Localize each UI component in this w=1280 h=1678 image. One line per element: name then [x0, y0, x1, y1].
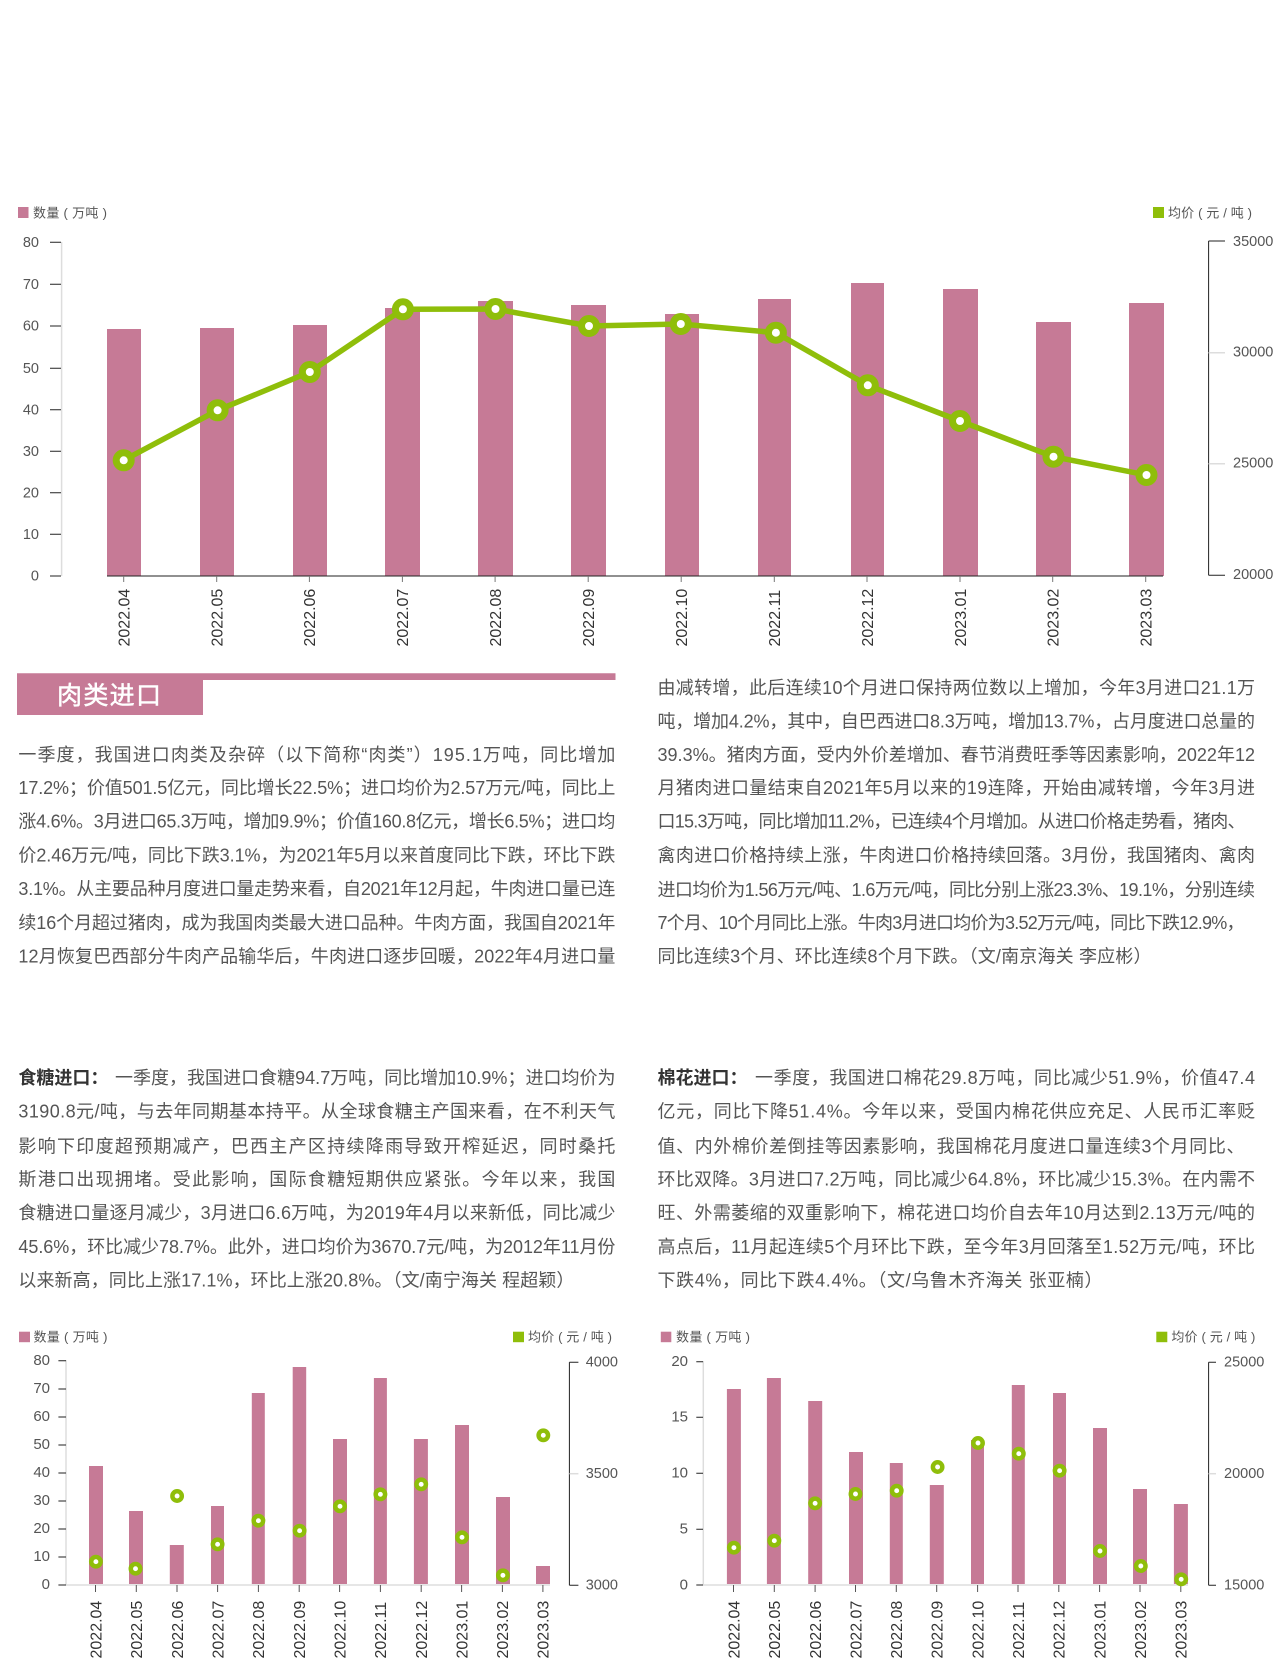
left axis: 0	[42, 1576, 50, 1593]
x axis labels: 2022.11	[767, 590, 784, 646]
x axis labels: 2023.03	[1174, 1601, 1191, 1658]
text block: meat imports right column: 7个月、10个月同比上涨。牛肉3月进口均价为3.52万元/吨，同比下跌12.9%，	[658, 913, 1244, 933]
x axis labels: 2022.05	[210, 589, 226, 646]
left axis: 50	[23, 361, 39, 377]
text block: meat imports left column: 价2.46万元/吨，同比下跌3.1%，为2021年5月以来首度同比下跌，环比下跌	[18, 846, 615, 866]
text block: cotton imports: 下跌4%，同比下跌4.4%。（文/乌鲁木齐海关 张亚楠）	[658, 1270, 1102, 1290]
text block: meat imports left column: 3.1%。从主要品种月度进口量走势来看，自2021年12月起，牛肉进口量已连	[18, 879, 615, 899]
text block: meat imports right column: 吨，增加4.2%，其中，自巴西进口8.3万吨，增加13.7%，占月度进口总量的	[658, 712, 1255, 732]
text block: meat imports left column: 续16个月超过猪肉，成为我国肉类最大进口品种。牛肉方面，我国自2021年	[18, 913, 615, 933]
text block: cotton imports: 一季度，我国进口棉花29.8万吨，同比减少51.9%，价值47.4	[755, 1068, 1255, 1088]
x axis with ticks	[703, 1585, 1188, 1592]
text block: meat imports left column	[18, 745, 615, 966]
right axis	[569, 1354, 618, 1594]
x axis labels	[88, 1601, 553, 1658]
price markers	[91, 1431, 548, 1580]
x axis labels: 2022.08	[488, 589, 505, 646]
left axis	[23, 235, 62, 585]
bars: quantity	[89, 1367, 550, 1584]
x axis labels: 2023.01	[953, 589, 970, 646]
heading: meat imports: 肉类进口	[57, 682, 161, 710]
left axis: 10	[33, 1548, 50, 1565]
text block: cotton imports: 值、内外棉价差倒挂等因素影响，我国棉花月度进口量连续3个月同比、	[658, 1136, 1244, 1156]
x axis labels: 2022.06	[808, 1601, 825, 1658]
text block: cotton imports: 旺、外需萎缩的双重影响下，棉花进口均价自去年10月达到2.13万元/吨的	[658, 1203, 1255, 1223]
heading: meat imports	[17, 673, 616, 715]
right axis: 25000	[1233, 456, 1273, 472]
text block: sugar imports	[18, 1067, 615, 1290]
x axis labels: 2023.02	[1133, 1601, 1150, 1658]
x axis labels	[726, 1601, 1191, 1658]
text block: cotton imports: 棉花进口：	[658, 1068, 748, 1088]
chart: sugar imports quantity and average price	[19, 1330, 618, 1658]
left axis: 30	[23, 444, 39, 460]
x axis labels: 2022.09	[930, 1601, 946, 1658]
text block: meat imports left column: 12月恢复巴西部分牛肉产品输华后，牛肉进口逐步回暖，2022年4月进口量	[18, 946, 615, 966]
x axis labels: 2022.04	[116, 589, 134, 646]
text block: meat imports right column: 口15.3万吨，同比增加11.2%，已连续4个月增加。从进口价格走势看，猪肉、	[658, 812, 1246, 832]
x axis labels: 2023.03	[1138, 589, 1156, 646]
text block: meat imports right column	[658, 678, 1255, 966]
x axis labels: 2022.07	[848, 1601, 865, 1658]
legend: quantity: 数量 ( 万吨 )	[33, 206, 107, 220]
x axis labels: 2022.08	[251, 1601, 268, 1658]
right axis	[1209, 234, 1273, 583]
bars: quantity	[727, 1378, 1188, 1584]
text block: sugar imports: 影响下印度超预期减产，巴西主产区持续降雨导致开榨延迟，同时桑托	[18, 1136, 615, 1156]
text block: sugar imports: 45.6%，环比减少78.7%。此外，进口均价为3670.7元/吨，为2012年11月份	[18, 1237, 615, 1257]
x axis labels: 2022.05	[767, 1601, 784, 1658]
chart: cotton imports quantity and average price	[661, 1330, 1264, 1658]
right axis: 25000	[1224, 1354, 1264, 1370]
right axis: 30000	[1233, 345, 1273, 361]
text block: sugar imports: 食糖进口量逐月减少，3月进口6.6万吨，为2019年4月以来新低，同比减少	[18, 1203, 615, 1223]
text block: meat imports right column: 禽肉进口价格持续上涨，牛肉进口价格持续回落。3月份，我国猪肉、禽肉	[658, 846, 1255, 866]
left axis: 30	[33, 1492, 50, 1509]
x axis labels: 2022.10	[332, 1601, 349, 1658]
x axis labels: 2022.07	[395, 589, 412, 646]
right axis: 35000	[1233, 234, 1273, 250]
x axis labels: 2022.06	[170, 1601, 187, 1658]
text block: cotton imports: 亿元，同比下降51.4%。今年以来，受国内棉花供应充足、人民币汇率贬	[658, 1101, 1255, 1121]
left axis: 20	[23, 485, 39, 501]
x axis labels: 2022.09	[581, 589, 598, 646]
x axis labels: 2022.08	[889, 1601, 906, 1658]
x axis labels: 2022.12	[1052, 1601, 1069, 1658]
text block: sugar imports: 一季度，我国进口食糖94.7万吨，同比增加10.9%；进口均价为	[115, 1068, 616, 1088]
x axis labels: 2022.10	[674, 589, 691, 646]
bars: quantity	[107, 283, 1164, 576]
right axis: 3000	[586, 1578, 618, 1594]
left axis: 70	[33, 1380, 50, 1397]
text block: cotton imports: 环比双降。3月进口7.2万吨，同比减少64.8%，环比减少15.3%。在内需不	[658, 1170, 1255, 1190]
x axis labels: 2022.06	[302, 589, 319, 646]
legend: quantity: 数量 ( 万吨 )	[34, 1330, 108, 1344]
left axis: 70	[23, 277, 39, 293]
x axis labels: 2022.11	[1011, 1602, 1028, 1658]
left axis: 20	[671, 1353, 688, 1370]
text block: meat imports right column: 39.3%。猪肉方面，受内外价差增加、春节消费旺季等因素影响，2022年12	[658, 745, 1255, 765]
left axis	[671, 1353, 703, 1593]
right axis: 20000	[1224, 1466, 1264, 1482]
x axis labels: 2023.03	[536, 1601, 553, 1658]
x axis labels: 2022.12	[860, 589, 877, 646]
text block: sugar imports: 食糖进口：	[18, 1067, 108, 1088]
chart: meat imports quantity and average price	[18, 206, 1273, 646]
right axis: 20000	[1233, 567, 1273, 583]
left axis: 15	[671, 1409, 688, 1426]
price markers	[116, 302, 1154, 482]
legend: average price: 均价 ( 元 / 吨 )	[1171, 1330, 1255, 1344]
x axis labels: 2022.04	[726, 1601, 743, 1658]
left axis: 60	[23, 319, 39, 335]
text block: cotton imports: 高点后，11月起连续5个月环比下跌，至今年3月回落至1.52万元/吨，环比	[658, 1237, 1255, 1257]
left axis: 80	[23, 235, 39, 251]
legend: average price: 均价 ( 元 / 吨 )	[1168, 206, 1252, 220]
x axis labels: 2023.02	[495, 1601, 512, 1658]
legend: quantity: 数量 ( 万吨 )	[676, 1330, 750, 1344]
x axis labels: 2022.10	[970, 1601, 987, 1658]
left axis: 80	[33, 1352, 50, 1369]
x axis labels: 2023.01	[454, 1601, 471, 1658]
left axis: 5	[680, 1521, 688, 1538]
left axis: 20	[33, 1520, 50, 1537]
x axis with ticks	[107, 576, 1163, 582]
text block: meat imports left column: 17.2%；价值501.5亿元，同比增长22.5%；进口均价为2.57万元/吨，同比上	[18, 778, 615, 798]
text block: cotton imports	[658, 1068, 1255, 1290]
text block: sugar imports: 3190.8元/吨，与去年同期基本持平。从全球食糖主产国来看，在不利天气	[18, 1101, 615, 1121]
left axis: 0	[680, 1576, 688, 1593]
text block: sugar imports: 斯港口出现拥堵。受此影响，国际食糖短期供应紧张。今年以来，我国	[18, 1170, 615, 1190]
x axis labels: 2022.09	[292, 1601, 309, 1658]
left axis: 60	[33, 1408, 50, 1425]
left axis: 40	[23, 402, 39, 418]
text block: meat imports right column: 进口均价为1.56万元/吨、1.6万元/吨，同比分别上涨23.3%、19.1%，分别连续	[658, 880, 1255, 900]
text block: meat imports right column: 由减转增，此后连续10个月进口保持两位数以上增加，今年3月进口21.1万	[658, 678, 1255, 698]
left axis: 10	[671, 1465, 688, 1482]
left axis: 10	[23, 527, 39, 543]
left axis: 0	[31, 569, 39, 585]
x axis labels: 2023.01	[1092, 1601, 1109, 1658]
x axis labels: 2022.05	[129, 1601, 146, 1658]
right axis: 4000	[586, 1354, 618, 1370]
legend: average price: 均价 ( 元 / 吨 )	[528, 1330, 612, 1344]
x axis labels	[116, 589, 1156, 646]
text block: meat imports right column: 月猪肉进口量结束自2021年5月以来的19连降，开始由减转增，今年3月进	[658, 778, 1255, 798]
left axis: 40	[33, 1464, 50, 1481]
price line	[124, 309, 1146, 475]
text block: meat imports right column: 同比连续3个月、环比连续8个月下跌。（文/南京海关 李应彬）	[658, 946, 1152, 966]
text block: meat imports left column: 涨4.6%。3月进口65.3万吨，增加9.9%；价值160.8亿元，增长6.5%；进口均	[18, 812, 615, 832]
x axis labels: 2022.11	[373, 1602, 390, 1658]
x axis labels: 2022.07	[210, 1601, 227, 1658]
left axis: 50	[33, 1436, 50, 1453]
right axis: 3500	[586, 1466, 618, 1482]
x axis labels: 2022.12	[414, 1601, 431, 1658]
left axis	[33, 1352, 66, 1593]
right axis	[1209, 1354, 1264, 1594]
price markers	[729, 1438, 1186, 1584]
x axis labels: 2023.02	[1046, 589, 1062, 646]
right axis: 15000	[1224, 1578, 1264, 1594]
x axis with ticks	[66, 1585, 550, 1592]
x axis labels: 2022.04	[88, 1601, 105, 1658]
text block: meat imports left column: 一季度，我国进口肉类及杂碎（以下简称“肉类”）195.1万吨，同比增加	[18, 745, 615, 765]
text block: sugar imports: 以来新高，同比上涨17.1%，环比上涨20.8%。（文/南宁海关 程超颖）	[18, 1270, 574, 1290]
